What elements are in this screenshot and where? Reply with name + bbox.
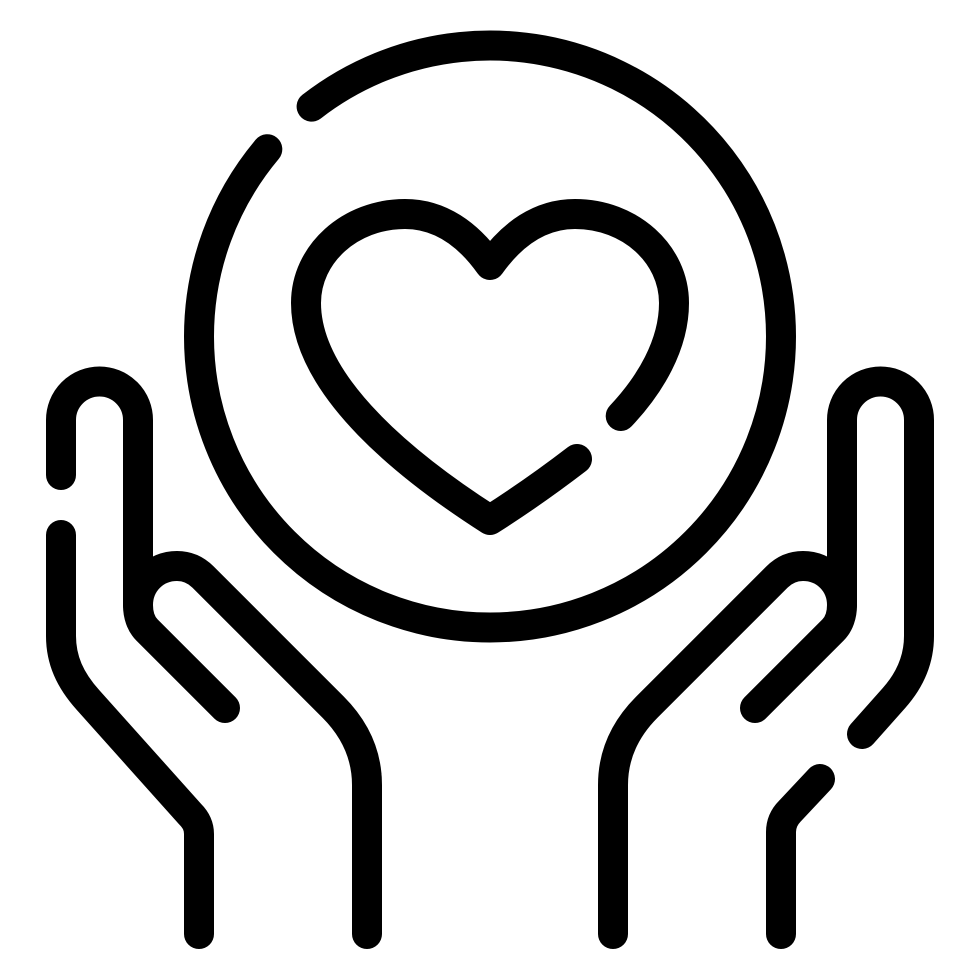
left hand outer edge bbox=[61, 535, 199, 934]
right hand palm and wrist bbox=[613, 566, 842, 934]
right hand finger bbox=[842, 382, 919, 734]
right hand lower edge bbox=[781, 779, 820, 934]
right hand bbox=[613, 382, 919, 934]
left hand bbox=[61, 382, 367, 934]
circle outline with gap bbox=[199, 46, 781, 628]
left hand finger bbox=[61, 382, 225, 708]
left hand palm and wrist bbox=[138, 566, 367, 934]
heart outline with gap bbox=[306, 214, 674, 520]
